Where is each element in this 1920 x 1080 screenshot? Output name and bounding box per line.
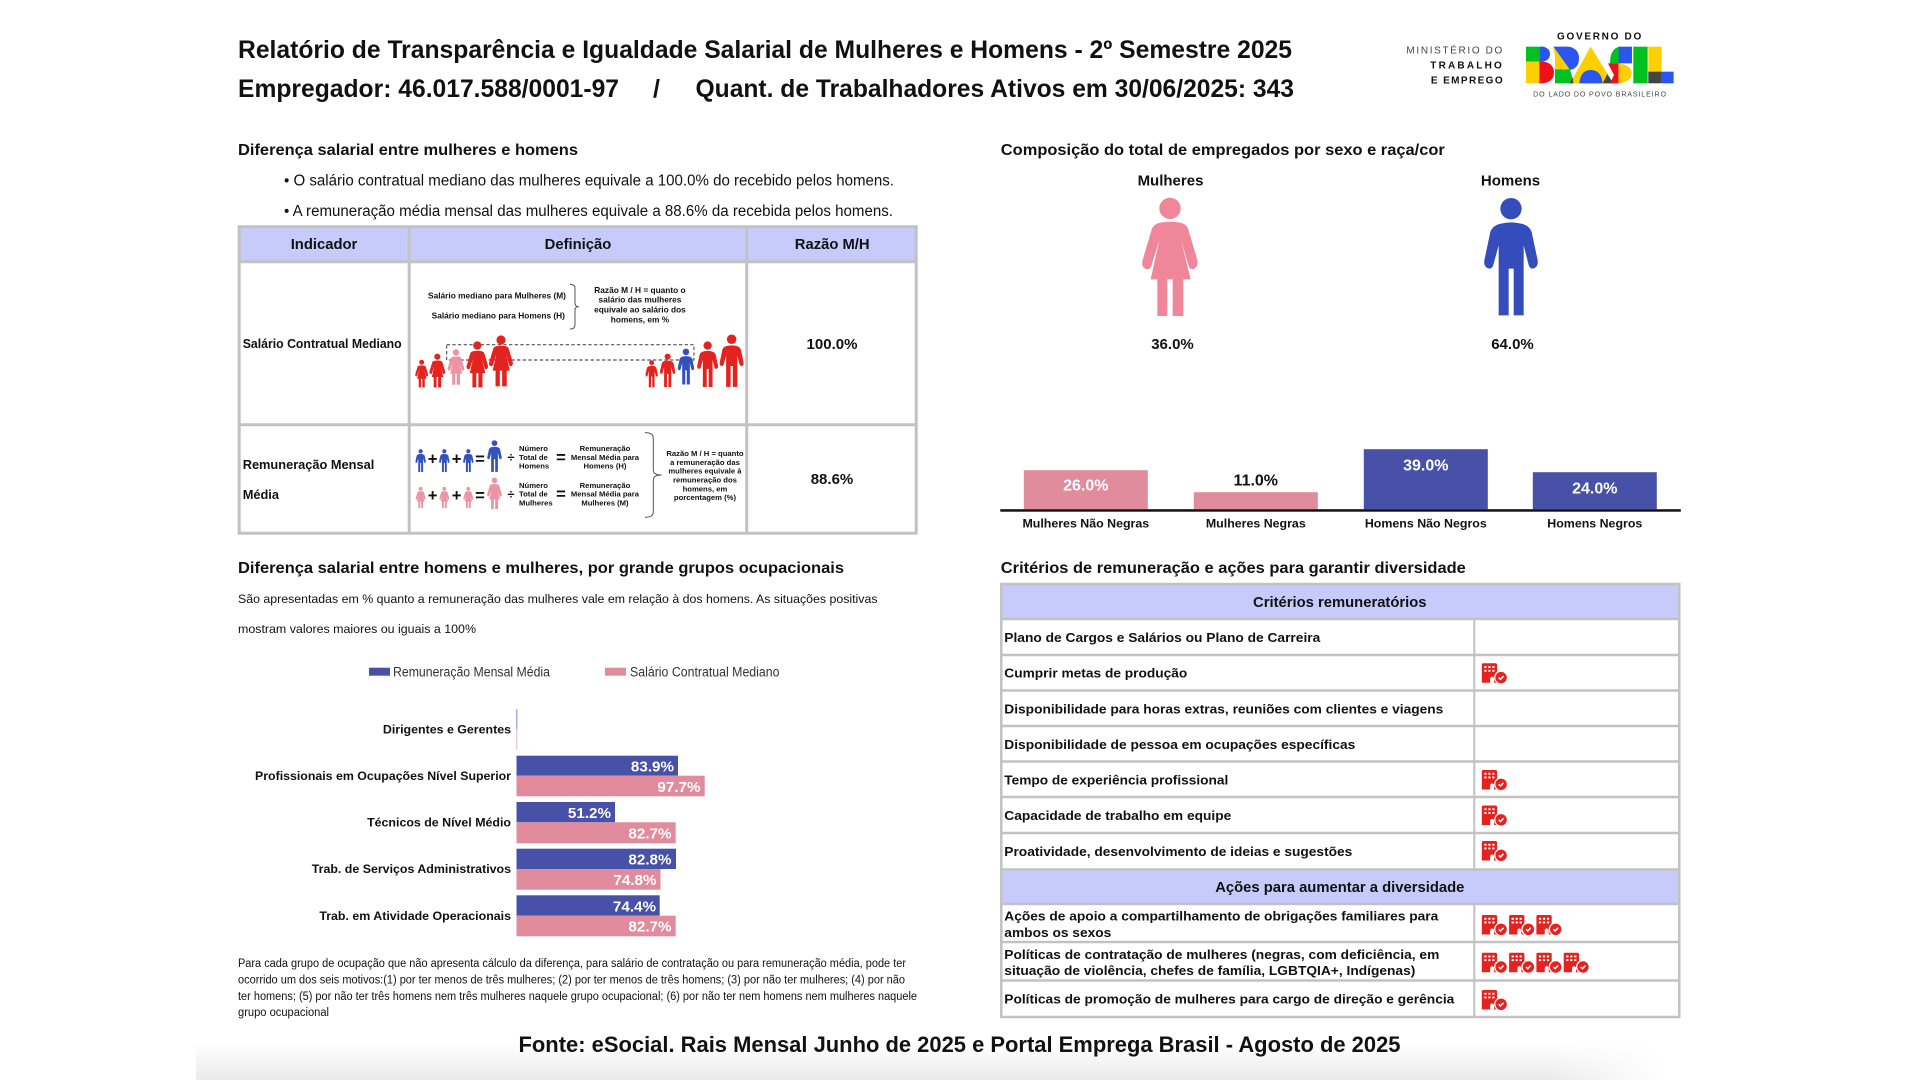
heading: critérios: Critérios de remuneração e ações para garantir diversidade [1001,560,1466,577]
header: ações: Ações para aumentar a diversidade [1215,880,1464,896]
legend: Salário Contratual Mediano [630,664,780,680]
diagram: remuneração média: Número [519,444,548,453]
value: homens 64.0%: 64.0% [1491,336,1534,353]
table header [291,237,870,253]
group: técnicos [367,802,676,843]
row: metas de produção [1004,663,1508,685]
bar chart: raça/cor [1000,449,1681,531]
logo: governo do brasil: DO LADO DO POVO BRASILEIRO [1533,90,1667,98]
row: salário contratual mediano: 100.0% [807,336,857,353]
diagram: remuneração média: homens, em [683,484,727,493]
row: ocupações específicas: Disponibilidade de pessoa em ocupações específicas [1004,738,1355,752]
group: dirigentes e gerentes [383,709,518,750]
group: profissionais: 97.7% [657,779,701,796]
group: serviços administrativos: 74.8% [613,872,657,889]
row: tempo de experiência [1004,770,1508,791]
diagram: remuneração média: ÷ [508,487,515,501]
diagram: remuneração média: Mensal Média para [571,453,640,462]
group: profissionais: Profissionais em Ocupações Nível Superior [255,769,511,783]
bar chart: raça/cor: 26.0% [1063,478,1108,495]
row: metas de produção: Cumprir metas de produção [1004,666,1188,680]
logo: governo do brasil [1526,32,1674,98]
diagram: salário mediano: Salário mediano para Mulheres (M) [428,290,566,300]
footnote: Para cada grupo de ocupação que não apresenta cálculo da diferença, para salário de contratação ou para remuneração média, pode ter [238,958,906,970]
group: atividade operacionais [319,895,676,936]
diagram: remuneração média: Mulheres [519,499,553,508]
table: critérios e ações [1001,584,1680,1017]
value: mulheres 36.0%: 36.0% [1151,336,1194,353]
row: horas extras: Disponibilidade para horas extras, reuniões com clientes e viagens [1004,702,1443,716]
table header: Indicador [291,237,358,253]
bar chart: raça/cor: Mulheres Negras [1206,517,1306,531]
row: remuneração mensal média: Média [243,487,280,502]
logo: ministério do trabalho: TRABALHO [1430,60,1504,72]
bullet: salário contratual: • O salário contratual mediano das mulheres equivale a 100.0% do recebido pelos homens. [284,172,894,190]
logo: ministério do trabalho: MINISTÉRIO DO [1406,44,1504,56]
bottom page shadow [196,1042,1666,1080]
footnote: ter homens; (5) por não ter três homens nem três mulheres naquele grupo ocupacional; (6) por não ter nem homens nem mulheres naquele [238,991,917,1003]
footnote: grupo ocupacional [238,1007,329,1019]
diagram: remuneração média: + [452,449,462,468]
icon: mulher [1142,198,1198,316]
heading: grupos ocupacionais: Diferença salarial entre homens e mulheres, por grande grupos ocupacionais [238,560,844,577]
row: plano de cargos: Plano de Cargos e Salários ou Plano de Carreira [1004,631,1321,645]
diagram: remuneração média: ÷ [508,450,515,464]
diagram: remuneração média: Razão M / H = quanto [666,449,744,458]
row: compartilhamento [1004,910,1563,940]
title: Empregador: 46.017.588/0001-97 [238,75,619,103]
row: remuneração mensal média: 88.6% [811,471,853,488]
row: proatividade [1004,841,1508,862]
bar chart: raça/cor: Homens Negros [1547,517,1642,531]
header: critérios remuneratórios: Critérios remuneratórios [1253,595,1427,611]
row: tempo de experiência: Tempo de experiência profissional [1004,774,1228,788]
row: salário contratual mediano: Salário Contratual Mediano [243,336,402,351]
footnote [238,958,917,1019]
diagram: salário mediano: salário das mulheres [599,295,682,305]
group: técnicos: Técnicos de Nível Médio [367,816,511,830]
text: explicação [238,592,878,636]
row: promoção [1004,990,1508,1011]
heading: diferença salarial: Diferença salarial entre mulheres e homens [238,142,578,159]
title: Quant. de Trabalhadores Ativos em 30/06/2025: 343 [696,75,1294,103]
diagram: remuneração média: + [428,449,438,468]
legend: Remuneração Mensal Média [393,664,550,680]
diagram: remuneração média: Total de [519,453,548,462]
group: técnicos: 51.2% [568,805,611,822]
diagram: remuneração média: Remuneração [580,481,631,490]
label: homens: Homens [1481,172,1540,190]
diagram: remuneração média: Número [519,481,548,490]
table header: Razão M/H [795,237,870,253]
bar chart: raça/cor: 39.0% [1403,458,1448,475]
diagram: remuneração média: Homens (H) [583,462,627,471]
title: / [653,75,660,103]
icon: homem [1484,198,1538,315]
row: contratação [1004,948,1590,978]
diagram: salário mediano: Salário mediano para Homens (H) [432,311,565,321]
row: remuneração mensal média: Remuneração Mensal [243,457,374,472]
diagram: salário mediano [415,284,744,387]
text: explicação: São apresentadas em % quanto a remuneração das mulheres vale em relação à dos homens. As situações positivas [238,592,878,606]
diagram: remuneração média: + [452,486,462,505]
diagram: remuneração média: remuneração dos [673,476,737,485]
diagram: remuneração média: porcentagem (%) [674,493,736,502]
text: explicação: mostram valores maiores ou iguais a 100% [238,622,476,636]
diagram: salário mediano: equivale ao salário dos [594,305,686,315]
diagram: remuneração média: = [475,486,485,505]
diagram: remuneração média: Total de [519,490,548,499]
group: técnicos: 82.7% [628,826,672,842]
diagram: remuneração média: = [556,448,566,467]
group: atividade operacionais: 74.4% [613,898,656,916]
diagram: remuneração média: Mensal Média para [571,490,640,499]
row: contratação: situação de violência, chefes de família, LGBTQIA+, Indígenas) [1004,964,1415,978]
diagram: remuneração média: = [475,449,485,468]
bullet: remuneração média: • A remuneração média mensal das mulheres equivale a 88.6% da recebida pelos homens. [284,203,893,220]
diagram: remuneração média: Remuneração [580,444,631,453]
heading: composição: Composição do total de empregados por sexo e raça/cor [1001,142,1445,159]
group: atividade operacionais: Trab. em Atividade Operacionais [319,909,511,923]
chart: grupos ocupacionais [255,709,705,936]
group: profissionais [255,756,705,796]
bar chart: raça/cor: 11.0% [1234,473,1278,490]
bar chart: raça/cor: 24.0% [1572,481,1617,498]
label: mulheres: Mulheres [1138,172,1203,190]
diagram: remuneração média: = [556,485,566,504]
bar chart: raça/cor: Homens Não Negros [1365,517,1487,531]
diagram: remuneração média: mulheres equivale à [668,467,742,476]
diagram: remuneração média: + [428,486,438,505]
legend [369,664,780,680]
diagram: salário mediano: Razão M / H = quanto o [594,285,686,295]
row: salário contratual mediano [243,336,857,353]
row: compartilhamento: ambos os sexos [1004,926,1111,940]
row: contratação: Políticas de contratação de mulheres (negras, com deficiência, em [1004,948,1439,962]
footnote: ocorrido um dos seis motivos:(1) por ter menos de três mulheres; (2) por ter menos de três homens; (3) por não ter mulheres; (4) por não [238,974,905,986]
table: indicadores [239,227,916,533]
title [238,36,1294,103]
source: Fonte: eSocial. Rais Mensal Junho de 2025 e Portal Emprega Brasil - Agosto de 2025 [518,1032,1400,1057]
row: promoção: Políticas de promoção de mulheres para cargo de direção e gerência [1004,992,1455,1006]
diagram: salário mediano: homens, em % [611,314,670,324]
row: trabalho em equipe: Capacidade de trabalho em equipe [1004,809,1231,823]
row: proatividade: Proatividade, desenvolvimento de ideias e sugestões [1004,845,1352,859]
diagram: remuneração média: Homens [519,462,549,471]
logo: ministério do trabalho [1406,44,1504,86]
title: Relatório de Transparência e Igualdade Salarial de Mulheres e Homens - 2º Semestre 2025 [238,36,1292,64]
group: serviços administrativos [312,849,676,890]
table header: Definição [545,237,611,253]
row: trabalho em equipe [1004,806,1508,827]
diagram: remuneração média [415,433,744,517]
bar chart: raça/cor: Mulheres Não Negras [1022,517,1149,531]
diagram: remuneração média: Mulheres (M) [581,499,629,508]
logo: governo do brasil: GOVERNO DO [1557,32,1643,42]
logo: ministério do trabalho: E EMPREGO [1431,76,1504,86]
row: remuneração mensal média [243,457,853,502]
diagram: remuneração média: a remuneração das [670,458,740,467]
group: profissionais: 83.9% [631,758,674,776]
group: dirigentes e gerentes: Dirigentes e Gerentes [383,722,511,736]
group: serviços administrativos: Trab. de Serviços Administrativos [312,862,511,876]
group: serviços administrativos: 82.8% [628,852,672,868]
group: atividade operacionais: 82.7% [628,918,672,936]
row: compartilhamento: Ações de apoio a compartilhamento de obrigações familiares para [1004,910,1439,924]
